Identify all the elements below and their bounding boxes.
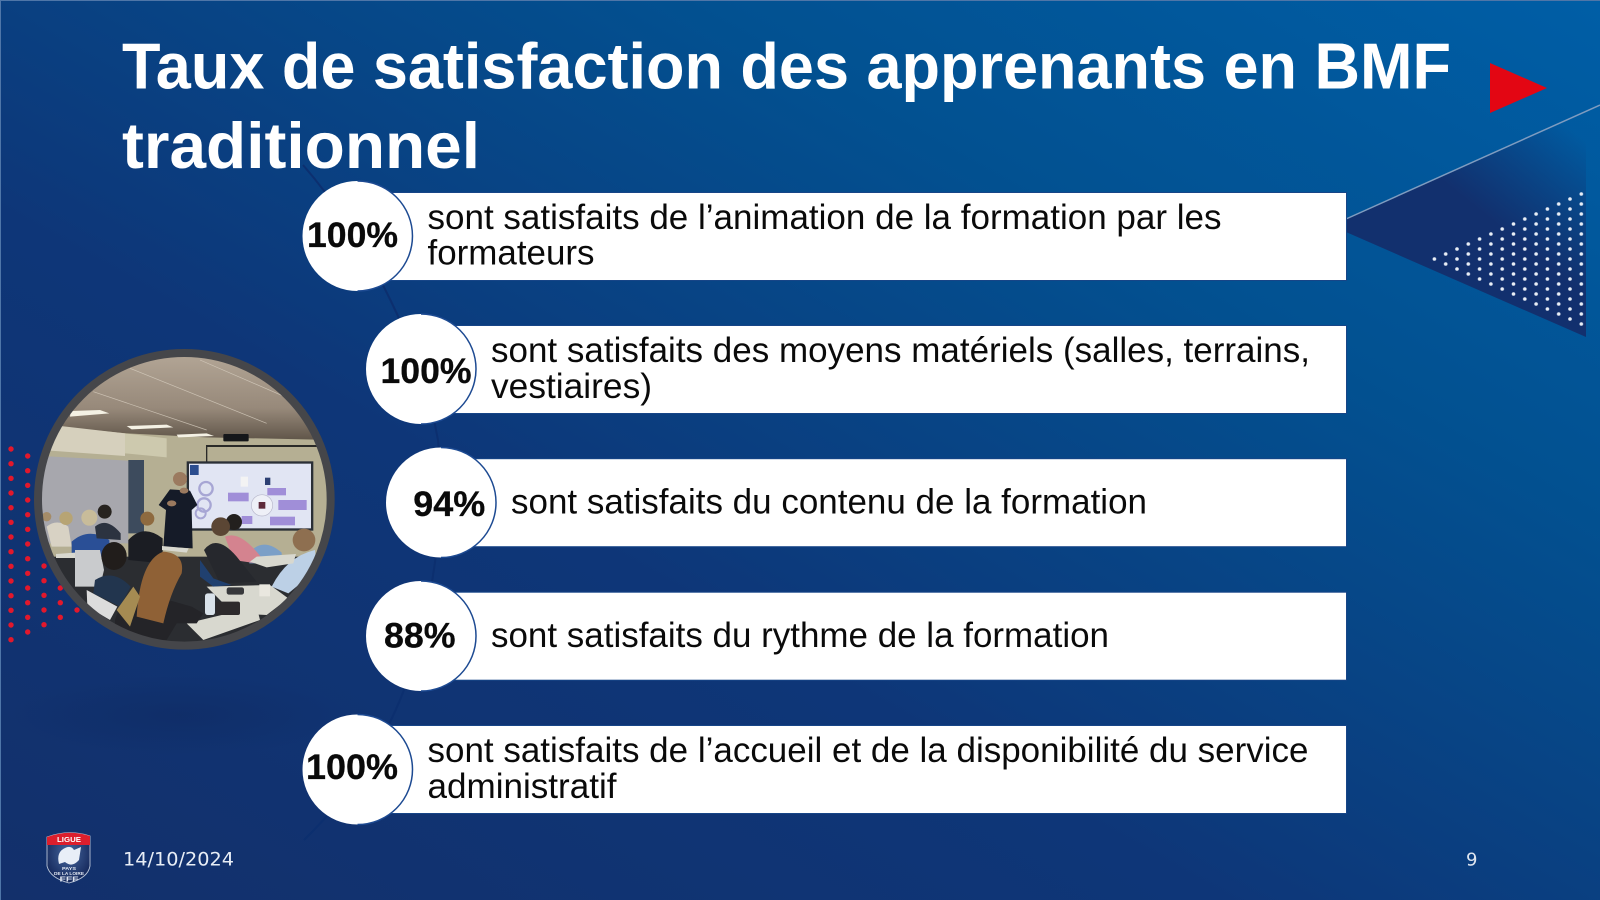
seated people, right bbox=[204, 514, 317, 593]
seated people, back row bbox=[42, 505, 163, 563]
row 5 bbox=[302, 714, 1346, 824]
row 4 bbox=[366, 581, 1346, 691]
bar 5 bbox=[380, 726, 1346, 814]
decorative red triangle bbox=[1490, 63, 1547, 113]
ceiling bbox=[62, 357, 314, 440]
bar 4 bbox=[444, 592, 1346, 680]
row 2 bbox=[366, 314, 1346, 424]
date: 14/10/2024 bbox=[123, 850, 234, 870]
percentage 4: 88% bbox=[384, 616, 456, 656]
circle 4 bbox=[366, 581, 476, 691]
percentage 3: 94% bbox=[413, 484, 485, 524]
logo: Ligue Pays de la Loire FFF: LIGUE bbox=[57, 837, 81, 844]
statement 2: vestiaires) bbox=[491, 366, 652, 406]
statement 1 bbox=[428, 197, 1222, 272]
circle 5 bbox=[302, 714, 412, 824]
floor bbox=[54, 556, 298, 642]
background shadow bbox=[10, 675, 350, 755]
page number: 9 bbox=[1466, 850, 1477, 870]
ceiling seams bbox=[93, 360, 300, 430]
percentage 2: 100% bbox=[380, 351, 472, 391]
statement 2: sont satisfaits des moyens matériels (salles, terrains, bbox=[491, 330, 1310, 370]
red dots pattern bbox=[8, 446, 80, 642]
decorative dotted triangle bbox=[1346, 105, 1600, 337]
bar 1 bbox=[380, 192, 1346, 280]
ceiling lights bbox=[70, 410, 214, 437]
blue chair bbox=[249, 545, 282, 563]
circle 2 bbox=[366, 314, 476, 424]
logo: Ligue Pays de la Loire FFF: DE LA LOIRE bbox=[54, 871, 84, 876]
photo: training session in a classroom bbox=[33, 343, 340, 650]
statement 1: sont satisfaits de l’animation de la formation par les bbox=[428, 197, 1222, 237]
statement 1: formateurs bbox=[428, 232, 594, 272]
logo: Ligue Pays de la Loire FFF bbox=[46, 830, 92, 884]
title: Taux de satisfaction des apprenants en BMF bbox=[122, 29, 1451, 102]
projection screen frame bbox=[206, 445, 317, 462]
percentage 1: 100% bbox=[307, 215, 398, 255]
back wall bbox=[48, 430, 327, 557]
tables bbox=[56, 546, 296, 640]
statement 5: sont satisfaits de l’accueil et de la disponibilité du service bbox=[428, 730, 1308, 770]
left wall bbox=[42, 425, 167, 543]
statement 5: administratif bbox=[428, 766, 617, 806]
title: traditionnel bbox=[122, 109, 480, 182]
circle 1 bbox=[302, 181, 412, 291]
row 1 bbox=[302, 181, 1346, 291]
statement 4: sont satisfaits du rythme de la formation bbox=[491, 615, 1109, 655]
title bbox=[122, 29, 1451, 182]
statement 5 bbox=[428, 730, 1308, 806]
background arc bbox=[303, 165, 440, 840]
presenter bbox=[159, 472, 197, 548]
screen bbox=[187, 461, 313, 531]
projector bbox=[223, 434, 249, 441]
logo: Ligue Pays de la Loire FFF: PAYS bbox=[62, 866, 76, 871]
row 3 bbox=[386, 448, 1346, 558]
statement 3: sont satisfaits du contenu de la formation bbox=[511, 482, 1147, 522]
bar 3 bbox=[464, 459, 1346, 547]
circle 3 bbox=[386, 448, 496, 558]
logo: Ligue Pays de la Loire FFF: FFF bbox=[60, 876, 80, 884]
statement 2 bbox=[491, 330, 1310, 406]
bar 2 bbox=[444, 326, 1346, 414]
percentage 5: 100% bbox=[306, 747, 398, 787]
seated people, front row bbox=[75, 542, 270, 640]
